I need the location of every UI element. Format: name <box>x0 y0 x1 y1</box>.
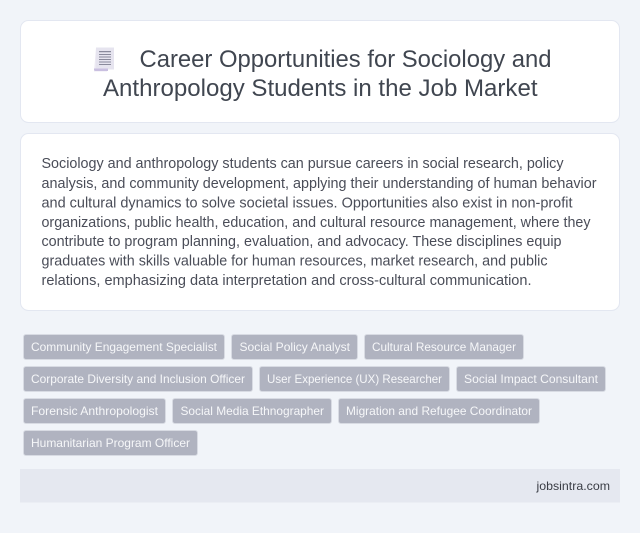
footer source text: jobsintra.com <box>535 479 610 493</box>
tag: User Experience (UX) Researcher <box>260 366 450 392</box>
icon: scroll document <box>94 48 114 72</box>
title: Career Opportunities for Sociology and <box>140 46 552 73</box>
tag: Forensic Anthropologist: Forensic Anthropologist <box>31 404 159 418</box>
title <box>103 46 552 102</box>
tag: Social Media Ethnographer: Social Media Ethnographer <box>180 404 324 418</box>
title: Anthropology Students in the Job Market <box>103 75 538 102</box>
footer bar <box>20 469 620 502</box>
tag: Community Engagement Specialist <box>24 334 224 360</box>
tag: Social Media Ethnographer <box>172 398 332 424</box>
tag: Social Policy Analyst <box>232 334 358 360</box>
tag: Migration and Refugee Coordinator <box>338 398 540 424</box>
panel: title card <box>20 20 620 122</box>
tag list: career roles <box>24 334 606 456</box>
text block: description: relations, emphasizing data interpretation and cross-cultural communication. <box>42 273 532 289</box>
tag: Humanitarian Program Officer <box>24 430 198 456</box>
tag: Humanitarian Program Officer: Humanitarian Program Officer <box>31 436 190 450</box>
text block: description: organizations, public health, education, and cultural resource management, where they <box>42 215 591 231</box>
text block: description: analysis, and community development, applying their understanding of human behavior <box>42 176 597 192</box>
tag: Social Impact Consultant <box>456 366 606 392</box>
tag: Social Policy Analyst: Social Policy Analyst <box>240 340 351 354</box>
tag: Social Impact Consultant: Social Impact Consultant <box>464 372 599 386</box>
panel: description card <box>20 134 620 310</box>
tag: Community Engagement Specialist: Community Engagement Specialist <box>31 340 218 354</box>
tag: Cultural Resource Manager <box>364 334 524 360</box>
text block: description: contribute to program planning, evaluation, and advocacy. These disciplines equip <box>42 234 562 250</box>
tag: Migration and Refugee Coordinator: Migration and Refugee Coordinator <box>346 404 532 418</box>
text block: description: and cultural dynamics to solve societal issues. Opportunities also exist in non-profit <box>42 196 572 212</box>
tag: Corporate Diversity and Inclusion Officer: Corporate Diversity and Inclusion Officer <box>31 372 245 386</box>
text block: description <box>42 156 597 289</box>
tag: Forensic Anthropologist <box>24 398 166 424</box>
text block: description: graduates with skills valuable for human resources, market research, and public <box>42 254 548 270</box>
tag: User Experience (UX) Researcher: User Experience (UX) Researcher <box>267 372 442 386</box>
text block: description: Sociology and anthropology students can pursue careers in social research, policy <box>42 156 564 172</box>
tag: Corporate Diversity and Inclusion Officer <box>24 366 252 392</box>
tag: Cultural Resource Manager: Cultural Resource Manager <box>372 340 516 354</box>
